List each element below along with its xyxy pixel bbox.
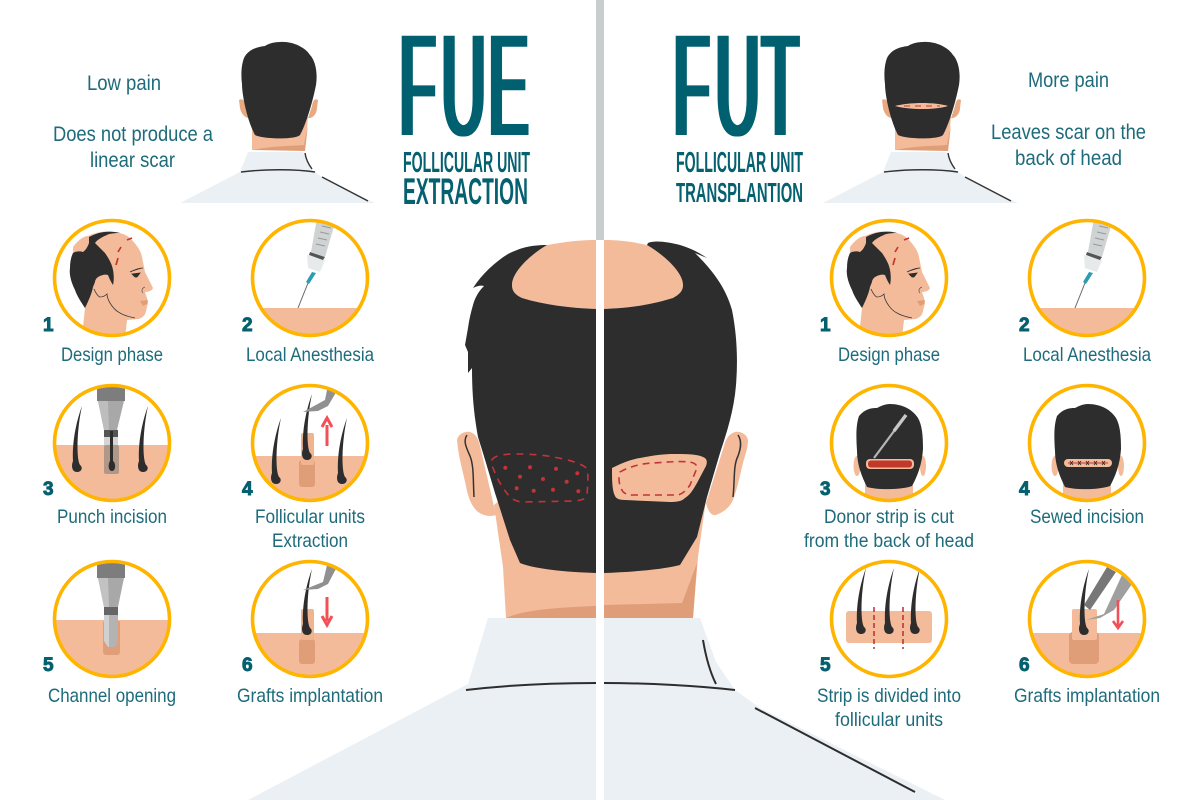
title: FUT: FUT [672,0,800,171]
FUT step 1 [820,220,946,366]
FUT step 1: Design phase [838,344,940,366]
text: FUE benefits: Does not produce a [53,123,213,146]
divider bar [596,0,604,240]
title: FUT: TRANSPLANTION [676,177,803,208]
FUE step 6: 6 [242,655,253,676]
text: FUT drawbacks: Leaves scar on the [991,121,1146,144]
FUE step 2: Local Anesthesia [246,344,374,366]
FUE step 6 [237,561,383,707]
FUE step 1: Design phase [61,344,163,366]
FUE step 2 [242,218,374,366]
FUT step 3: 3 [820,479,831,500]
text: FUE benefits [53,72,213,172]
FUE step 3: Punch incision [57,506,167,528]
hair left [465,245,596,573]
FUT step 6 [1014,562,1160,707]
FUE step 4: Follicular units [255,506,365,528]
FUT step 5: 5 [820,655,831,676]
FUT step 6: Grafts implantation [1014,685,1160,707]
shirt [248,618,945,800]
FUE step 2: 2 [242,315,253,336]
FUT step 1: 1 [820,315,831,336]
FUE step 3: 3 [43,479,54,500]
panel: FUE [43,0,530,707]
title: FUE: FUE [398,0,530,171]
text: FUE benefits: linear scar [90,149,175,172]
FUT step 4: Sewed incision [1030,506,1144,528]
title: FUE: EXTRACTION [403,171,528,212]
FUT step 5 [817,562,961,731]
text: FUT drawbacks [991,69,1146,170]
central head illustration [248,240,945,800]
FUE step 4 [242,385,370,552]
FUE donor area with dots [492,454,588,502]
FUT step 4 [1019,386,1144,528]
FUT donor strip [612,454,707,502]
panel: FUT: FOLLICULAR UNIT [676,147,803,179]
FUT step 2: Local Anesthesia [1023,344,1151,366]
FUT step 3 [804,386,974,552]
text: FUT drawbacks: More pain [1028,69,1109,92]
FUE step 1 [43,220,170,366]
ears [457,432,748,516]
FUT step 4: 4 [1019,479,1030,500]
neck [494,500,706,618]
bald area [512,240,683,309]
FUE step 3 [43,383,172,528]
FUE step 5 [43,559,176,707]
FUE step 5: 5 [43,655,54,676]
FUE step 4: Extraction [272,530,348,552]
FUT step 3: from the back of head [804,530,974,552]
small head FUE [180,42,375,203]
FUT step 2: 2 [1019,315,1030,336]
FUE step 4: 4 [242,479,253,500]
FUT step 5: Strip is divided into [817,685,961,707]
FUE step 1: 1 [43,315,54,336]
FUT step 2 [1019,218,1151,366]
small head FUT with slit [823,42,1018,203]
hair right [604,242,737,573]
FUE step 5: Channel opening [48,685,176,707]
panel: FUT [672,0,1160,731]
text: FUE benefits: Low pain [87,72,161,95]
collar lines [466,640,915,792]
FUT step 3: Donor strip is cut [824,506,955,528]
FUT step 6: 6 [1019,655,1030,676]
FUT step 5: follicular units [835,709,943,731]
FUE step 6: Grafts implantation [237,685,383,707]
text: FUT drawbacks: back of head [1015,147,1122,170]
infographic: FUE vs FUT: FOLLICULAR UNIT [403,147,530,179]
